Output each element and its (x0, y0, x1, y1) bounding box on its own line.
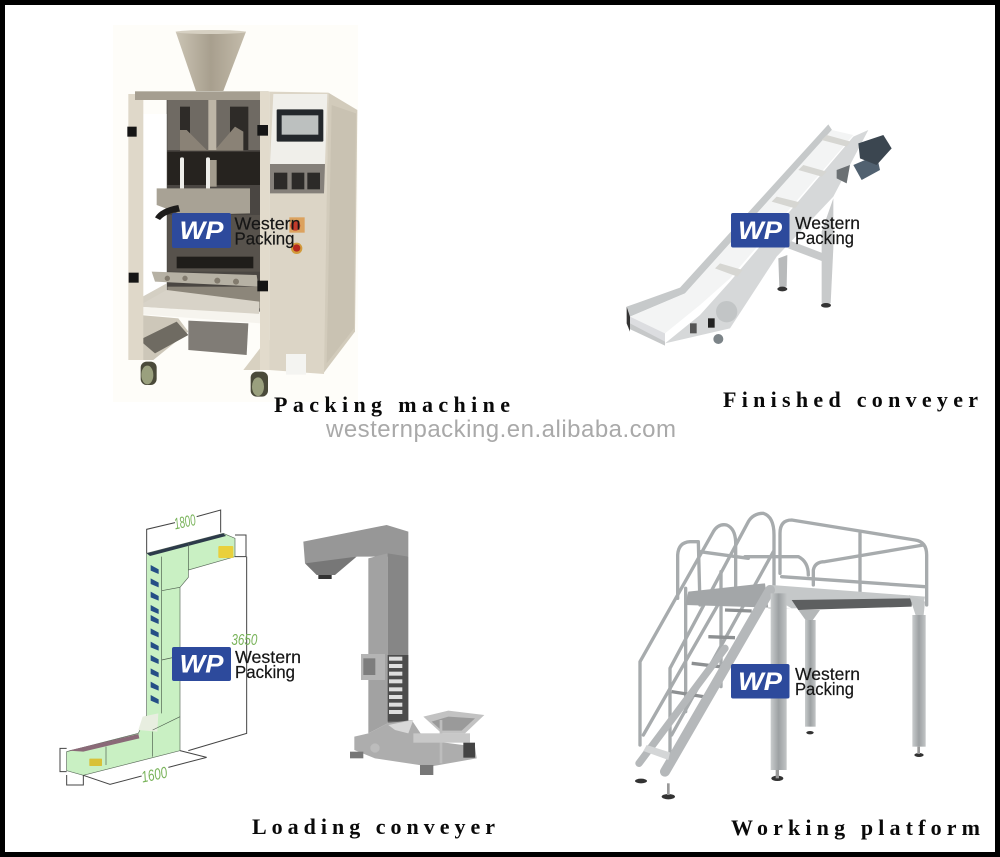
logo: Western Packing (731, 213, 860, 248)
illustration: green conveyer diagram: 3650 (231, 632, 257, 649)
logo: Western Packing: Packing (235, 662, 295, 682)
illustration: steel bucket elevator (303, 525, 484, 775)
logo: Western Packing: WP (738, 668, 782, 696)
logo: Western Packing: Packing (795, 228, 854, 248)
logo: Western Packing: Western (795, 213, 860, 233)
panel: bucket elevator (252, 525, 495, 839)
caption: Packing machine: Packing machine (274, 392, 510, 417)
illustration: packing machine (127, 30, 357, 397)
logo: Western Packing (172, 213, 300, 248)
logo: Western Packing: Western (235, 647, 301, 667)
panel: working platform (635, 513, 980, 840)
logo: Western Packing (731, 664, 860, 699)
illustration: finished conveyer (627, 124, 892, 346)
illustration: green conveyer diagram (60, 510, 257, 787)
logo: Western Packing: WP (180, 217, 224, 245)
panel: loading conveyer diagram (60, 510, 301, 787)
illustration: green conveyer diagram: 1600 (140, 765, 169, 787)
panel: finished conveyer (627, 124, 978, 412)
website watermark: westernpacking.en.alibaba.com (325, 416, 676, 443)
caption: Working platform: Working platform (731, 815, 980, 840)
panel: packing machine (113, 25, 510, 417)
caption: Finished conveyer: Finished conveyer (723, 387, 978, 412)
logo: Western Packing: Western (234, 214, 300, 234)
logo: Western Packing: WP (180, 650, 224, 678)
logo: Western Packing: Western (795, 664, 860, 684)
logo: Western Packing: Packing (234, 228, 294, 248)
illustration: steel working platform (635, 513, 927, 799)
logo: Western Packing: WP (738, 217, 782, 245)
logo: Western Packing (172, 647, 301, 682)
logo: Western Packing: Packing (795, 679, 854, 699)
illustration: green conveyer diagram: 1800 (173, 512, 197, 533)
caption: Loading conveyer: Loading conveyer (252, 814, 495, 839)
